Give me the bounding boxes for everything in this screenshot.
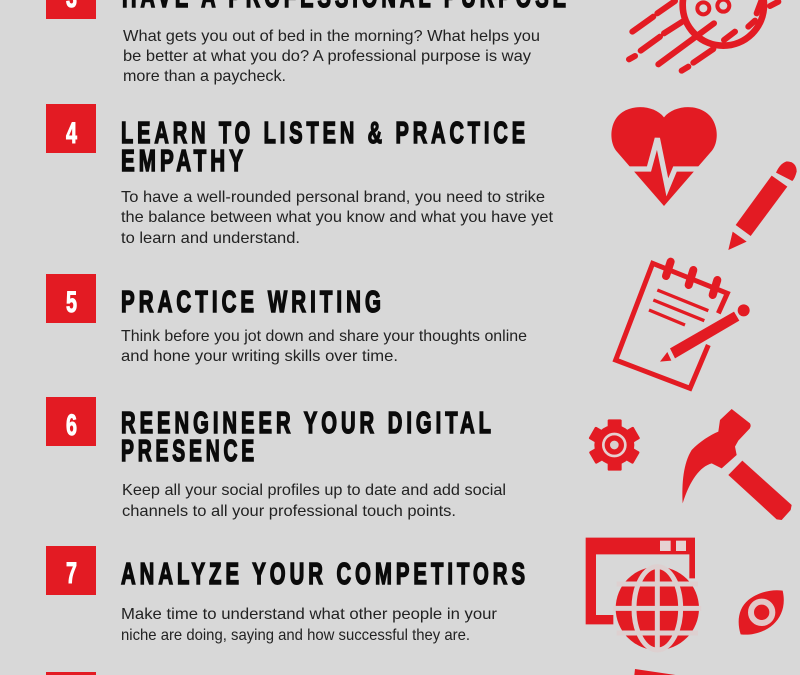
number badge 6 [46,397,96,446]
body text 5: Think before you jot down and share your thoughts online [121,328,527,345]
heading 6: REENGINEER YOUR DIGITAL [121,406,495,440]
heading 6 [121,406,495,468]
heading 6: PRESENCE [121,434,258,468]
icon: pencil [728,161,797,250]
heading 4: EMPATHY [121,144,247,178]
body text 6: channels to all your professional touch points. [122,503,456,520]
number badge 7 [46,546,96,595]
body text 7: Make time to understand what other people in your [121,606,498,623]
step 5: practice writing [46,274,527,365]
body text 5 [121,328,527,365]
body text 4: the balance between what you know and what you have yet [121,209,554,226]
heading 4: LEARN TO LISTEN & PRACTICE [121,116,529,150]
icon: notepad with pencil [616,262,750,388]
body text 4: to learn and understand. [121,230,300,247]
icon: eye [739,590,784,635]
body text 3: more than a paycheck. [123,68,286,85]
number badge 7: 7 [66,557,77,590]
icon: gear [588,419,640,471]
body text 4 [121,189,554,247]
icon: heart with pulse [611,107,717,206]
body text 7: niche are doing, saying and how successful they are. [121,627,470,644]
step 7: analyze competitors [46,546,529,644]
body text 3: be better at what you do? A professional purpose is way [123,48,531,65]
step 4: listen and empathy [46,104,554,247]
body text 4: To have a well-rounded personal brand, you need to strike [121,189,545,206]
icon: browser window with globe [586,538,701,652]
body text 6 [122,482,506,520]
number badge 4: 4 [66,117,77,150]
heading 5: PRACTICE WRITING [121,285,385,319]
number badge 4 [46,104,96,153]
body text 3: What gets you out of bed in the morning? What helps you [123,28,540,45]
body text 3 [123,28,540,85]
step 3: professional purpose [46,0,570,85]
icon: hammer [682,409,792,520]
icon: meteor [629,0,778,71]
number badge 3 [46,0,96,19]
body text 7 [121,606,498,644]
heading 7: ANALYZE YOUR COMPETITORS [121,557,529,591]
number badge 6: 6 [66,409,77,442]
heading 4 [121,116,529,178]
step 8 badge, cropped [46,672,96,675]
step 6: digital presence [46,397,506,520]
icon: cropped shape at bottom [634,669,680,675]
body text 5: and hone your writing skills over time. [121,348,398,365]
number badge 5 [46,274,96,323]
number badge 5: 5 [66,286,77,319]
body text 6: Keep all your social profiles up to date and add social [122,482,506,499]
